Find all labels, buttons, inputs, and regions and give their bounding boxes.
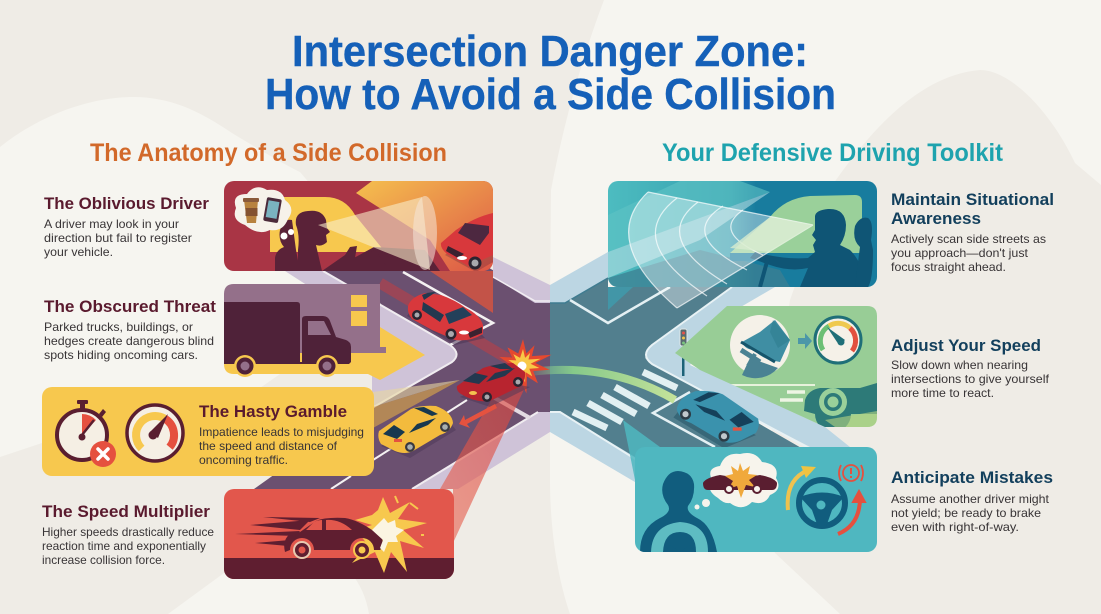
approaching car xyxy=(804,383,877,427)
windshield xyxy=(730,195,862,253)
icon: steering wheel xyxy=(799,480,845,527)
panel: oblivious driver illustration xyxy=(224,181,493,313)
text: obscured threat: hedges create dangerous blind xyxy=(44,334,214,348)
beam: speed multiplier to crash xyxy=(440,383,527,543)
light road band xyxy=(608,181,770,252)
text: oblivious driver: your vehicle. xyxy=(44,245,113,259)
text: hasty gamble xyxy=(199,402,364,467)
text: adjust speed xyxy=(891,336,1050,400)
panel: speed multiplier illustration xyxy=(224,489,454,579)
panel: situational awareness illustration xyxy=(608,181,877,310)
cloud: crash xyxy=(710,453,778,507)
text: adjust speed: intersections to give yourself xyxy=(891,372,1050,386)
title: How to Avoid a Side Collision xyxy=(265,70,836,119)
lane markings xyxy=(331,272,670,489)
road: left half xyxy=(254,257,550,495)
scanning sweep beam xyxy=(629,192,813,308)
text: adjust speed: Slow down when nearing xyxy=(891,358,1028,372)
text: speed multiplier: reaction time and exponentially xyxy=(42,539,206,553)
car: red sedan xyxy=(407,292,485,345)
truck xyxy=(224,302,351,377)
panel: anticipate mistakes illustration xyxy=(623,420,877,552)
text: speed multiplier: increase collision force. xyxy=(42,553,165,567)
red car xyxy=(445,254,493,271)
text: adjust speed: Adjust Your Speed xyxy=(891,336,1041,355)
traffic light xyxy=(680,329,687,376)
text: hasty gamble: The Hasty Gamble xyxy=(199,402,347,421)
text: situational awareness: focus straight ahead. xyxy=(891,260,1006,274)
title: Intersection Danger Zone: xyxy=(292,27,808,76)
left road sidewalks xyxy=(285,257,550,489)
text: anticipate mistakes: Assume another driver might xyxy=(891,492,1050,506)
text: speed multiplier: The Speed Multiplier xyxy=(42,502,210,521)
arrow: brake xyxy=(838,498,860,534)
arrow: direction of travel xyxy=(459,404,497,428)
thought bubble xyxy=(235,187,291,232)
car: blue hatchback xyxy=(673,391,759,448)
text: situational awareness: you approach—don't just xyxy=(891,246,1029,260)
icon: foot on pedal xyxy=(730,315,790,378)
thought dots xyxy=(694,504,700,510)
driver from behind xyxy=(640,471,717,552)
text: situational awareness: Actively scan side streets as xyxy=(891,232,1046,246)
text: obscured threat xyxy=(44,297,216,362)
text: adjust speed: more time to react. xyxy=(891,386,994,400)
text: situational awareness: Maintain Situational xyxy=(891,190,1054,209)
impact burst xyxy=(352,497,427,573)
yellow ground xyxy=(224,327,425,380)
icon: speedometer xyxy=(127,405,183,461)
dashboard xyxy=(355,247,440,271)
text: speed multiplier xyxy=(42,502,214,567)
text: oblivious driver: The Oblivious Driver xyxy=(44,194,209,213)
arrow: steer xyxy=(788,470,808,510)
icon: speed gauge xyxy=(815,317,861,363)
text: hasty gamble: oncoming traffic. xyxy=(199,453,288,467)
panel: obscured threat illustration xyxy=(224,284,425,380)
text: hasty gamble: Impatience leads to misjudging xyxy=(199,425,364,439)
left section heading: The Anatomy of a Side Collision xyxy=(90,139,447,167)
text: anticipate mistakes: even with right-of-way. xyxy=(891,520,1019,534)
driver silhouette xyxy=(750,209,868,287)
orange wedge xyxy=(356,181,493,271)
panel: adjust speed illustration xyxy=(675,306,877,427)
beam: hasty gamble to car xyxy=(373,380,460,428)
intersection roads xyxy=(254,252,850,520)
crosswalk xyxy=(573,372,677,428)
right section heading: Your Defensive Driving Toolkit xyxy=(662,139,1004,167)
text: speed multiplier: Higher speeds drastically reduce xyxy=(42,525,214,539)
title xyxy=(265,27,836,119)
driver silhouette xyxy=(296,211,330,271)
text: obscured threat: The Obscured Threat xyxy=(44,297,216,316)
panel: hasty gamble card xyxy=(42,387,374,476)
burst core xyxy=(372,518,404,552)
collision burst xyxy=(498,339,552,394)
text: hasty gamble: the speed and distance of xyxy=(199,439,338,453)
arrow xyxy=(798,333,812,349)
car: crashing red car xyxy=(457,363,530,407)
yellow window xyxy=(270,197,385,252)
speeding car xyxy=(284,518,383,552)
right road sidewalks xyxy=(550,252,850,485)
text: anticipate mistakes: Anticipate Mistakes xyxy=(891,468,1053,487)
icon: brake warning xyxy=(839,465,863,481)
car: yellow hatchback xyxy=(378,406,456,458)
text: obscured threat: Parked trucks, buildings, or xyxy=(44,320,193,334)
text: obscured threat: spots hiding oncoming cars. xyxy=(44,348,198,362)
text: situational awareness: Awareness xyxy=(891,209,981,228)
text: situational awareness xyxy=(891,190,1054,274)
text: anticipate mistakes: not yield; be ready to brake xyxy=(891,506,1041,520)
vision cone xyxy=(318,197,430,270)
text: anticipate mistakes xyxy=(891,468,1053,534)
text: oblivious driver: direction but fail to register xyxy=(44,231,192,245)
text: oblivious driver xyxy=(44,194,209,259)
path arc xyxy=(530,370,675,400)
building xyxy=(224,284,386,353)
text: oblivious driver: A driver may look in your xyxy=(44,217,179,231)
red skid streak xyxy=(380,283,510,360)
icon: stopwatch xyxy=(57,400,116,467)
road: right half xyxy=(550,278,850,520)
